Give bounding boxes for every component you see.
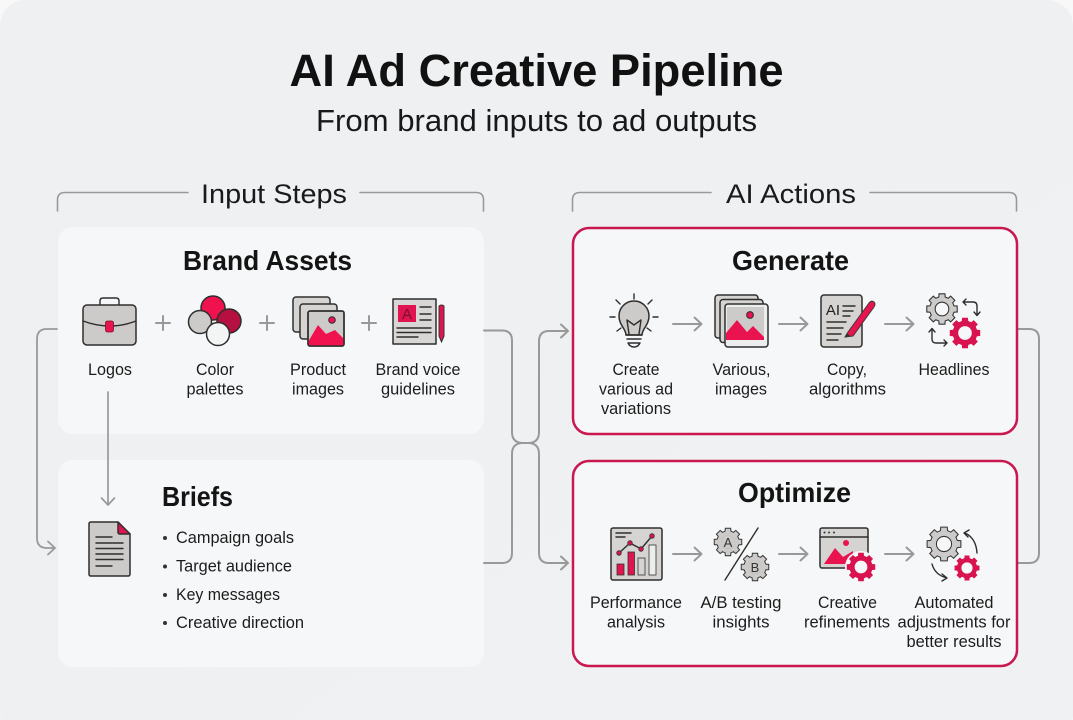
plus sign — [362, 316, 376, 330]
label: automated adjustments: adjustments for — [898, 612, 1011, 632]
label: automated adjustments: Automated — [914, 593, 994, 612]
connector: generate to optimize — [1018, 329, 1039, 563]
connector: inputs to AI actions — [484, 324, 568, 570]
plus sign — [156, 316, 170, 330]
icon: AI document with pencil — [821, 295, 875, 347]
label: automated adjustments: better results — [906, 632, 1002, 651]
arrow — [779, 318, 808, 330]
icon: image stack — [715, 295, 768, 347]
bullet list: Creative direction — [176, 613, 304, 632]
label: create various ad variations: variations — [601, 399, 671, 418]
label: creative refinements: Creative — [818, 593, 877, 612]
label: A/B testing insights — [700, 593, 782, 632]
arrow: logos to briefs — [102, 392, 114, 505]
heading: optimize: Optimize — [738, 477, 851, 508]
bullet list: Target audience — [176, 556, 292, 576]
heading: briefs: Briefs — [162, 481, 233, 512]
icon: A/B testing gears: A — [724, 535, 733, 550]
label: logos: Logos — [88, 360, 132, 379]
label: headlines: Headlines — [918, 360, 990, 379]
bullet list — [163, 528, 304, 632]
icon: AI document with pencil: AI — [826, 302, 840, 319]
label: copy algorithms: Copy, — [827, 360, 867, 379]
label: brand voice guidelines — [376, 360, 460, 398]
section header: input steps — [58, 179, 484, 211]
panel: briefs — [58, 460, 484, 667]
label: A/B testing insights: A/B testing — [700, 593, 782, 612]
icon: light bulb — [610, 294, 658, 347]
subtitle: From brand inputs to ad outputs — [316, 103, 757, 138]
section header: input steps: Input Steps — [201, 179, 347, 209]
label: various images: Various, — [712, 360, 770, 379]
label: color palettes: Color — [196, 360, 234, 379]
label: performance analysis — [590, 593, 682, 632]
arrow — [673, 548, 702, 560]
label: product images — [290, 360, 346, 398]
label: creative refinements — [804, 593, 890, 632]
icon: A/B testing gears — [714, 528, 769, 581]
icon: brand voice document: A — [402, 306, 412, 323]
icon: brief document — [89, 522, 130, 576]
label: product images: Product — [290, 360, 346, 379]
label: creative refinements: refinements — [804, 612, 890, 632]
panel: brand assets — [58, 227, 484, 434]
label: automated adjustments — [898, 593, 1011, 651]
title: AI Ad Creative Pipeline — [290, 45, 784, 96]
arrow: brand assets around to briefs — [37, 329, 57, 554]
icon: briefcase — [83, 298, 136, 345]
label: brand voice guidelines: guidelines — [381, 380, 455, 398]
label: color palettes — [186, 360, 244, 398]
heading: brand assets: Brand Assets — [183, 245, 352, 276]
label: various images: images — [715, 380, 767, 398]
panel: generate — [573, 228, 1017, 434]
icon: brand voice document — [393, 299, 444, 344]
arrow — [885, 548, 914, 560]
icon: gears with arrows — [927, 294, 980, 348]
label: copy algorithms — [809, 360, 886, 398]
label: copy algorithms: algorithms — [809, 380, 886, 398]
label: various images — [712, 360, 770, 398]
icon: color palette circles — [188, 296, 241, 346]
panel: optimize — [573, 461, 1017, 666]
icon: performance chart — [611, 528, 662, 580]
section header: AI actions: AI Actions — [726, 179, 856, 209]
bullet list: Key messages — [176, 585, 280, 604]
label: brand voice guidelines: Brand voice — [376, 360, 460, 379]
label: product images: images — [292, 380, 344, 398]
label: performance analysis: Performance — [590, 593, 682, 612]
icon: browser with gear — [820, 528, 877, 583]
label: performance analysis: analysis — [607, 612, 665, 632]
icon: automated gears — [927, 527, 979, 581]
label: A/B testing insights: insights — [712, 612, 770, 632]
heading: generate: Generate — [732, 245, 849, 276]
bullet list: Campaign goals — [176, 528, 294, 547]
label: create various ad variations — [599, 360, 673, 418]
arrow — [673, 318, 702, 330]
icon: A/B testing gears: B — [751, 560, 759, 575]
label: create various ad variations: various ad — [599, 380, 673, 398]
section header: AI actions — [572, 179, 1016, 211]
arrow — [885, 318, 914, 330]
label: color palettes: palettes — [186, 380, 244, 398]
plus sign — [260, 316, 274, 330]
arrow — [779, 548, 808, 560]
label: create various ad variations: Create — [612, 360, 660, 379]
icon: product images — [293, 297, 344, 346]
